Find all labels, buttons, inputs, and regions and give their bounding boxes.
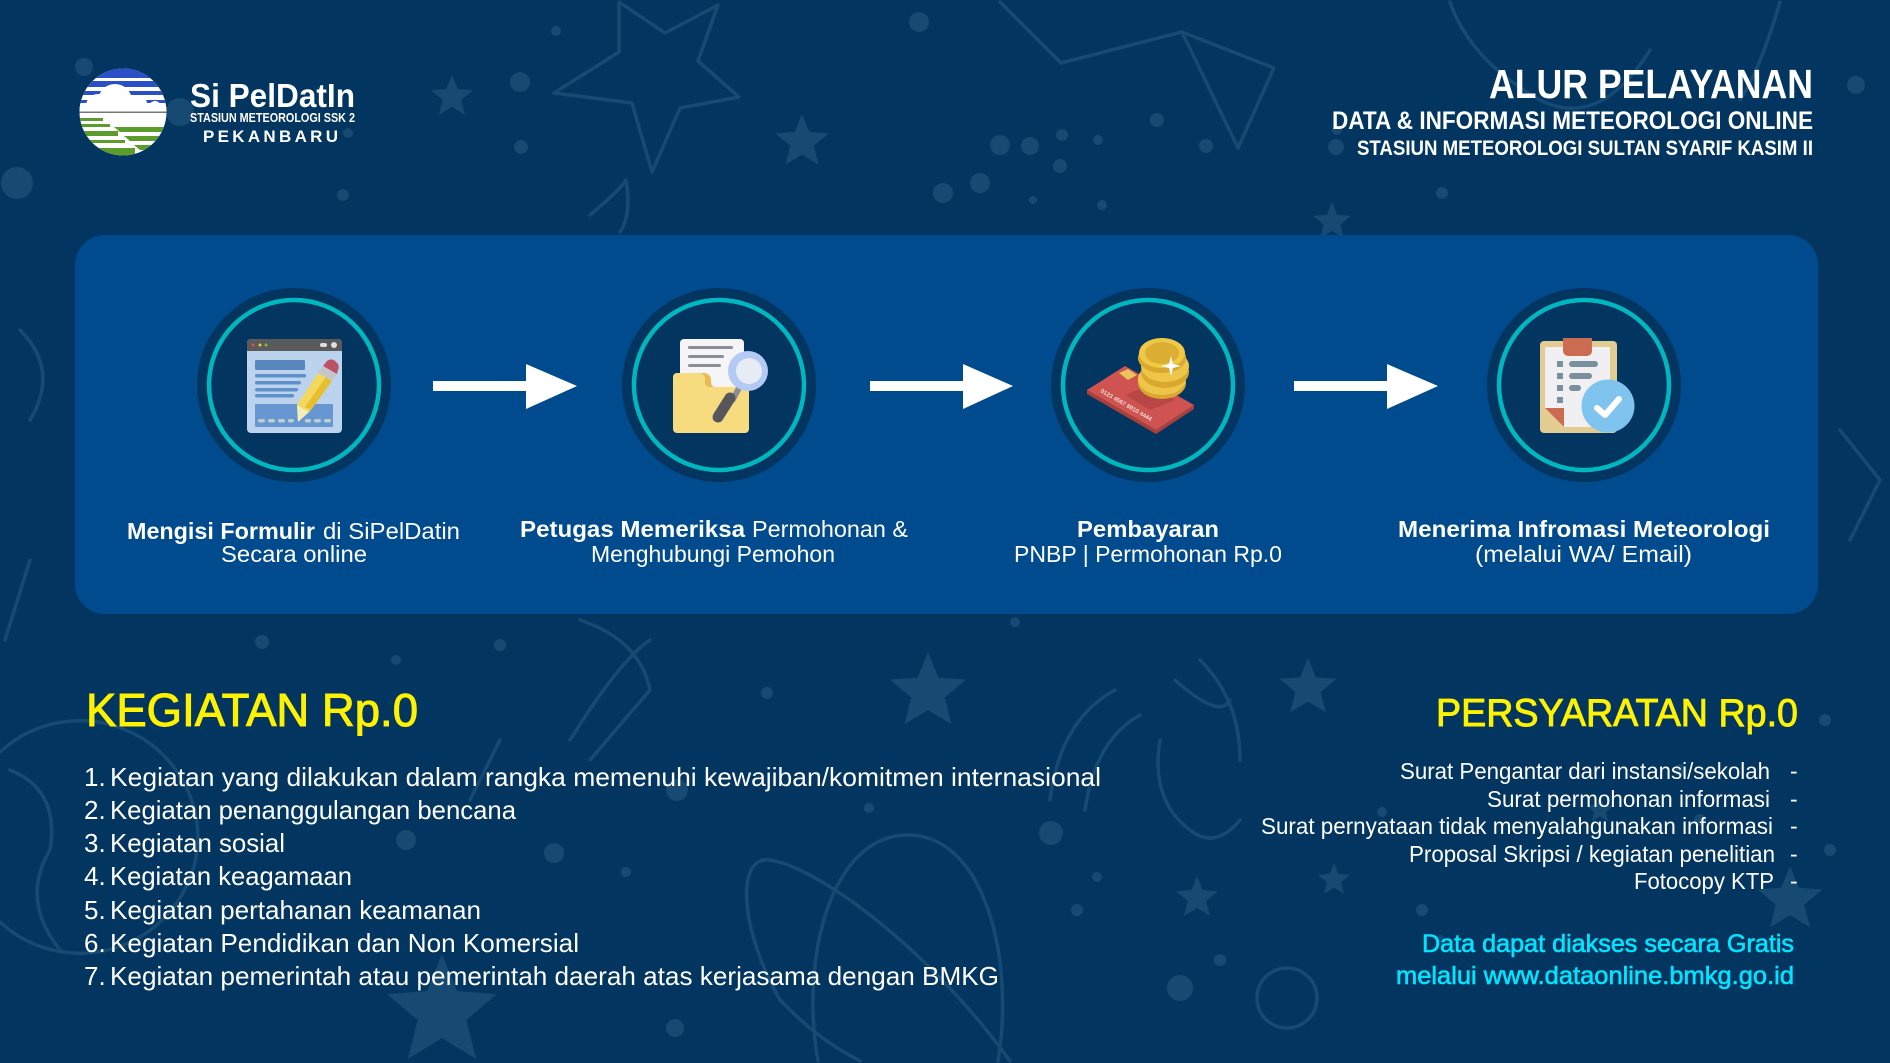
arrow 2	[870, 364, 1013, 409]
step 3	[1014, 288, 1282, 567]
main title: ALUR PELAYANAN	[1489, 61, 1813, 107]
logo city: PEKANBARU	[203, 127, 338, 146]
icon: credit card and coins: 0123 4567 8910 4444	[1099, 389, 1153, 423]
list: kegiatan items: 2.	[84, 795, 106, 825]
icon: clipboard with check	[1540, 338, 1634, 433]
list: persyaratan items: -	[1790, 786, 1798, 812]
list: kegiatan items: 1.	[84, 762, 106, 792]
step 4 caption	[1398, 516, 1770, 567]
icon: credit card and coins	[1087, 338, 1194, 434]
list: persyaratan items: -	[1790, 758, 1798, 784]
arrow 3	[1294, 364, 1438, 409]
arrow 1	[433, 364, 577, 409]
list: persyaratan items: Surat permohonan informasi	[1487, 786, 1770, 812]
list: kegiatan items: 5.	[84, 895, 106, 925]
step 1 caption	[127, 518, 460, 567]
list: persyaratan items: -	[1790, 868, 1798, 894]
list: kegiatan items: Kegiatan Pendidikan dan Non Komersial	[110, 928, 579, 958]
step 2 caption: Permohonan &	[752, 516, 908, 542]
list: kegiatan items: 7.	[84, 961, 106, 991]
logo title: Si PelDatIn	[190, 77, 355, 114]
subtitle: DATA & INFORMASI METEOROLOGI ONLINE	[1332, 107, 1813, 135]
list: kegiatan items: Kegiatan pertahanan keamanan	[110, 895, 481, 925]
list: persyaratan items: Surat Pengantar dari instansi/sekolah	[1400, 758, 1770, 784]
list: persyaratan items: Fotocopy KTP	[1634, 868, 1774, 894]
step 4	[1398, 288, 1770, 567]
step 1 circle	[197, 288, 391, 482]
step 3 circle	[1051, 288, 1245, 482]
list: kegiatan items: Kegiatan yang dilakukan dalam rangka memenuhi kewajiban/komitmen internasional	[110, 762, 1101, 792]
logo subtitle: STASIUN METEOROLOGI SSK 2	[190, 111, 355, 125]
list: persyaratan items: Proposal Skripsi / kegiatan penelitian	[1409, 841, 1775, 867]
list: kegiatan items: 4.	[84, 861, 106, 891]
access note	[1396, 930, 1794, 990]
step 4 caption: (melalui WA/ Email)	[1475, 541, 1692, 567]
heading: persyaratan: PERSYARATAN Rp.0	[1436, 692, 1798, 735]
header title block	[1332, 61, 1813, 160]
logo emblem	[79, 68, 167, 157]
access note: Data dapat diakses secara Gratis	[1422, 930, 1794, 958]
list: kegiatan items: Kegiatan penanggulangan bencana	[110, 795, 517, 825]
list: kegiatan items: 3.	[84, 828, 106, 858]
step 1	[127, 288, 460, 567]
icon: folder and magnifier	[673, 339, 768, 433]
step 2 caption: Menghubungi Pemohon	[591, 541, 835, 567]
station name: STASIUN METEOROLOGI SULTAN SYARIF KASIM II	[1357, 137, 1813, 160]
access note: melalui www.dataonline.bmkg.go.id	[1396, 962, 1794, 990]
list: kegiatan items: Kegiatan sosial	[110, 828, 285, 858]
step 4 circle	[1487, 288, 1681, 482]
step 1 caption: Mengisi Formulir	[127, 518, 315, 544]
step 3 caption: Pembayaran	[1077, 516, 1219, 542]
list: persyaratan items: -	[1790, 813, 1798, 839]
heading: kegiatan: KEGIATAN Rp.0	[86, 684, 418, 736]
step 1 caption: di SiPelDatin	[323, 518, 460, 544]
step 4 caption: Menerima Infromasi Meteorologi	[1398, 516, 1770, 542]
list: persyaratan items	[1261, 758, 1798, 894]
step 2	[520, 288, 908, 567]
icon: web form and pencil	[247, 339, 342, 433]
list: persyaratan items: -	[1790, 841, 1798, 867]
list: kegiatan items: Kegiatan keagamaan	[110, 861, 352, 891]
panel: service flow	[75, 235, 1818, 614]
step 2 caption	[520, 516, 908, 567]
step 1 caption: Secara online	[221, 541, 367, 567]
step 3 caption: PNBP | Permohonan Rp.0	[1014, 541, 1282, 567]
step 2 caption: Petugas Memeriksa	[520, 516, 745, 542]
step 3 caption	[1014, 516, 1282, 567]
list: kegiatan items: Kegiatan pemerintah atau pemerintah daerah atas kerjasama dengan BMKG	[110, 961, 999, 991]
logo	[79, 68, 355, 157]
list: persyaratan items: Surat pernyataan tidak menyalahgunakan informasi	[1261, 813, 1773, 839]
list: kegiatan items	[84, 762, 1101, 991]
list: kegiatan items: 6.	[84, 928, 106, 958]
step 2 circle	[622, 288, 816, 482]
